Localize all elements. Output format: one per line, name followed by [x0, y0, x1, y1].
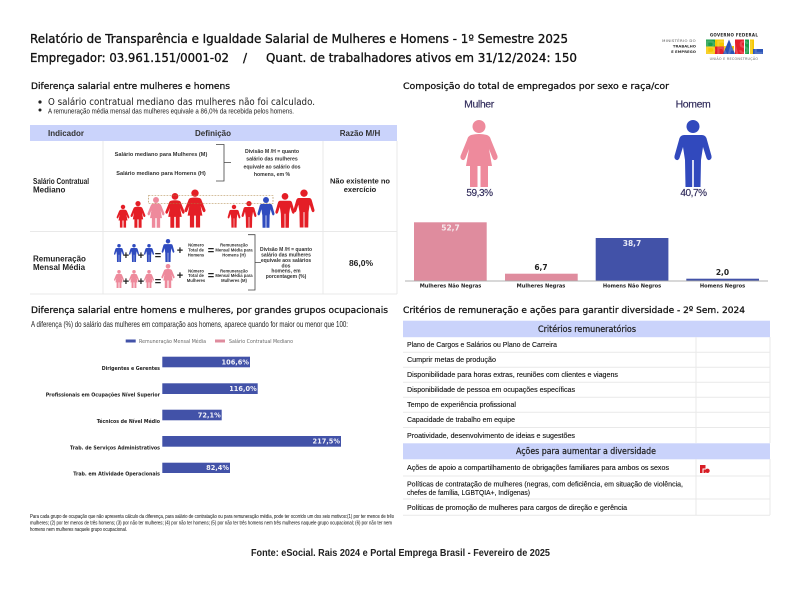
definition text: divisão M/H: Divisão M /H = quanto [245, 149, 299, 155]
definition text: divisão: porcentagem (%) [266, 274, 307, 280]
formula: mulheres: Mulheres [187, 278, 206, 283]
formula: homens: = [155, 250, 161, 262]
action rows: Políticas de contratação de mulheres (negras, com deficiência, em situação de violência, [407, 480, 683, 488]
bar chart: grupos ocupacionais: Técnicos de Nível Médio [97, 418, 161, 425]
definition text: divisão M/H [243, 149, 301, 178]
bar chart: grupos ocupacionais: Trab. de Serviços Administrativos [70, 446, 160, 452]
title: / [243, 51, 248, 65]
formula: mulheres: + [123, 276, 129, 288]
definition text: salário mediano: Salário mediano para Mulheres (M) [115, 152, 207, 158]
table header: Definição [195, 129, 231, 138]
bracket [248, 235, 261, 290]
row label: remuneração [33, 254, 86, 272]
bar chart: grupos ocupacionais: Trab. em Atividade Operacionais [73, 472, 160, 478]
formula: homens: Homens [188, 252, 205, 258]
bar chart: grupos ocupacionais [46, 357, 341, 478]
criteria rows: Cumprir metas de produção [407, 355, 496, 364]
logo: ministério e governo federal: BRASIL [705, 38, 763, 59]
heading: composição: Composição do total de empregados por sexo e raça/cor [403, 82, 669, 92]
bar chart: composição por sexo e raça: Mulheres Não Negras [420, 284, 481, 290]
formula: homens: + [177, 245, 183, 257]
heading: grupos ocupacionais: Diferença salarial entre homens e mulheres, por grandes grupos ocupacionais [31, 306, 388, 316]
action rows: Ações de apoio a compartilhamento de obrigações familiares para ambos os sexos [407, 463, 669, 472]
value: não existente: exercício [344, 185, 377, 194]
criteria rows: Plano de Cargos e Salários ou Plano de Carreira [407, 340, 558, 349]
definition text: divisão [260, 247, 312, 280]
bar chart: grupos ocupacionais: 72,1% [198, 412, 221, 420]
heading: diferença salarial: Diferença salarial entre mulheres e homens [31, 82, 230, 92]
logo: ministério e governo federal: MINISTÉRIO DO [662, 38, 696, 43]
pictogram: mulher: Mulher [464, 98, 495, 110]
table header [48, 129, 380, 138]
subtitle: A diferença (%) do salário das mulheres em comparação aos homens, aparece quando for maior ou menor que 100: [31, 319, 348, 329]
section header: critérios: Critérios remuneratórios [538, 324, 637, 335]
logo: ministério e governo federal: E EMPREGO [671, 49, 697, 54]
formula: homens: + [138, 250, 144, 262]
bar chart: grupos ocupacionais: Dirigentes e Gerentes [102, 366, 160, 372]
row label: salário contratual: Mediano [33, 186, 66, 194]
formula: mulheres: + [138, 276, 144, 288]
row label: salário contratual [33, 177, 89, 194]
table header: Razão M/H [340, 129, 380, 138]
formula: homens: Remuneração [220, 242, 248, 248]
section header: ações: Ações para aumentar a diversidade [516, 447, 656, 457]
logo: ministério e governo federal: TRABALHO [673, 44, 697, 48]
formula: mulheres: Remuneração [220, 268, 248, 274]
footnote: homens nem mulheres naquele grupo ocupacional. [30, 527, 127, 533]
bar chart: composição por sexo e raça [405, 222, 768, 290]
bullets [38, 97, 315, 116]
row label: salário contratual: Salário Contratual [33, 177, 89, 186]
pictogram: homem [674, 98, 712, 199]
footnote [30, 514, 394, 533]
value: 86,0%: 86,0% [349, 258, 373, 268]
footnote: mulheres; (2) por ter menos de três homens; (3) por não ter mulheres; (4) por não ter homens; (5) por não ter três homens nem três mulheres naquele grupo ocupacional; (6) por não ter nem [30, 520, 392, 526]
bar chart: grupos ocupacionais: 82,4% [206, 464, 229, 472]
row label: remuneração: Remuneração [33, 254, 86, 264]
criteria rows: Tempo de experiência profissional [407, 400, 516, 409]
definition text: divisão: Divisão M /H = quanto [260, 247, 312, 253]
definition text: divisão M/H: salário das mulheres [246, 156, 298, 162]
pictogram: homem: 40,7% [680, 188, 707, 199]
formula: homens [114, 239, 253, 262]
criteria rows: Proatividade, desenvolvimento de ideias e sugestões [407, 431, 575, 440]
bullets: O salário contratual mediano das mulheres não foi calculado. [48, 97, 315, 108]
bar chart: composição por sexo e raça: Homens Não Negros [603, 284, 661, 290]
bar chart: grupos ocupacionais: 116,0% [229, 385, 257, 393]
formula: mulheres: + [177, 270, 183, 282]
bar chart: grupos ocupacionais: 217,5% [313, 438, 340, 446]
logo: ministério e governo federal: UNIÃO E RECONSTRUÇÃO [710, 56, 758, 61]
title: Relatório de Transparência e Igualdade Salarial de Mulheres e Homens - 1º Semestre 2025 [30, 32, 568, 46]
pictogram: mulher [460, 98, 498, 199]
bar chart: grupos ocupacionais: Profissionais em Ocupações Nível Superior [46, 392, 161, 398]
table header: Indicador [48, 129, 84, 138]
definition text: divisão: equivale aos salários [261, 258, 311, 264]
icons: mulheres, mediana [117, 190, 206, 228]
criteria rows: Disponibilidade para horas extras, reuniões com clientes e viagens [407, 370, 618, 379]
bar chart: composição por sexo e raça: 2,0 [716, 268, 729, 277]
action rows: chefes de família, LGBTQIA+, Indígenas) [407, 488, 530, 497]
criteria rows: Disponibilidade de pessoa em ocupações específicas [407, 385, 575, 394]
formula: mulheres: Número [188, 268, 204, 274]
legend: Salário Contratual Mediano [229, 338, 293, 345]
panel: critérios e ações [403, 321, 770, 515]
footnote: Para cada grupo de ocupação que não apresenta cálculo da diferença, para salário de contratação ou para remuneração média, pode ter ocorrido um dos seis motivos:(1) por ter menos de três [30, 514, 394, 520]
definition text: divisão: homens, em [271, 268, 301, 274]
definition text: divisão M/H: homens, em % [254, 172, 291, 178]
definition text: salário mediano: Salário mediano para Homens (H) [116, 171, 206, 177]
pictogram: homem: Homem [676, 98, 711, 110]
bullets: A remuneração média mensal das mulheres equivale a 86,0% da recebida pelos homens. [48, 108, 294, 116]
bracket [216, 144, 231, 181]
title [30, 32, 577, 65]
dashed highlight [148, 196, 273, 204]
logo: ministério e governo federal [662, 32, 763, 61]
legend: Remuneração Mensal Média [139, 338, 206, 345]
formula: homens: Homens (H) [222, 252, 246, 258]
bar chart: composição por sexo e raça: 38,7 [623, 239, 641, 248]
formula: mulheres: = [155, 276, 161, 288]
title: Empregador: 03.961.151/0001-02 [30, 51, 229, 65]
criteria rows: Capacidade de trabalho em equipe [407, 415, 515, 424]
icon: marca vermelha [700, 465, 710, 473]
panel: tabela de indicadores [30, 125, 397, 294]
formula: mulheres: Mensal Média para [215, 273, 253, 278]
definition text: salário mediano [115, 152, 207, 177]
pictogram: mulher: 59,3% [466, 188, 493, 199]
formula: mulheres: = [208, 270, 214, 282]
definition text: divisão: salário das mulheres [261, 252, 311, 258]
value: não existente: Não existente no [330, 176, 390, 186]
formula: homens: + [123, 250, 129, 262]
bar chart: composição por sexo e raça: Homens Negros [700, 284, 745, 290]
definition text: divisão M/H: equivale ao salário dos [243, 164, 301, 170]
formula: homens: = [208, 245, 214, 257]
value: não existente [330, 176, 390, 194]
bar chart: grupos ocupacionais: 106,6% [222, 358, 249, 366]
formula: homens: Mensal Média para [215, 248, 253, 252]
formula: homens: Total de [188, 248, 205, 252]
icons: homens, mediana [228, 190, 315, 228]
source: Fonte: eSocial. Rais 2024 e Portal Emprega Brasil - Fevereiro de 2025 [251, 548, 550, 559]
bar chart: composição por sexo e raça: Mulheres Negras [517, 284, 565, 290]
action rows [407, 463, 683, 512]
heading: critérios: Critérios de remuneração e ações para garantir diversidade - 2º Sem. 2024 [403, 305, 745, 316]
formula: homens: Número [188, 242, 204, 248]
bar chart: composição por sexo e raça: 6,7 [534, 263, 548, 272]
legend [126, 338, 293, 345]
formula: mulheres: Mulheres (M) [221, 278, 248, 283]
action rows: Políticas de promoção de mulheres para cargos de direção e gerência [407, 503, 628, 512]
definition text: divisão: dos [282, 263, 291, 269]
formula: mulheres: Total de [188, 273, 205, 278]
formula: mulheres [114, 264, 253, 288]
bar chart: composição por sexo e raça: 52,7 [441, 224, 460, 232]
criteria rows [407, 340, 618, 440]
logo: ministério e governo federal: GOVERNO FEDERAL [710, 32, 758, 38]
title: Quant. de trabalhadores ativos em 31/12/2024: 150 [266, 51, 577, 65]
row label: remuneração: Mensal Média [33, 263, 86, 272]
